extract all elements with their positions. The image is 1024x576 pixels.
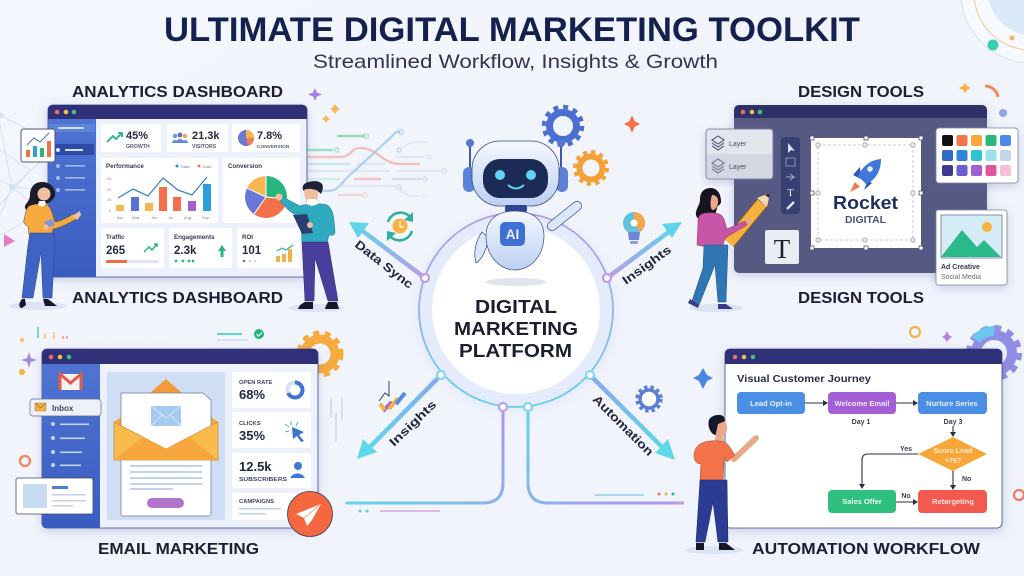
branch labels: No bbox=[901, 493, 911, 500]
platform glow bbox=[418, 214, 614, 410]
email sidebar bbox=[42, 364, 100, 528]
canvas with rocket logo: Rocket bbox=[833, 192, 898, 213]
robot neck bbox=[505, 205, 527, 212]
layer panel: Layer bbox=[729, 164, 747, 171]
figure: woman with tablet bbox=[9, 182, 81, 310]
panel: design tools bbox=[734, 105, 987, 273]
stat card: growth: GROWTH bbox=[126, 144, 150, 150]
decoration: sparkles near analytics bbox=[4, 88, 340, 247]
heading: automation workflow: AUTOMATION WORKFLOW bbox=[752, 541, 981, 558]
stat card: campaigns bbox=[232, 493, 311, 520]
canvas with rocket logo: DIGITAL bbox=[845, 215, 886, 226]
heading: email marketing: EMAIL MARKETING bbox=[98, 541, 259, 558]
flow step: welcome email: Welcome Email bbox=[835, 399, 889, 408]
line and bar chart: performance: 30 bbox=[107, 176, 112, 181]
decoration: design sparkles bbox=[624, 83, 1007, 133]
connector nodes bbox=[421, 274, 611, 411]
central platform bbox=[418, 213, 614, 410]
pie chart: conversion: Conversion bbox=[228, 163, 262, 170]
automation window frame bbox=[725, 349, 1002, 528]
line and bar chart: performance: 10 bbox=[107, 197, 112, 202]
line and bar chart: performance: Jun bbox=[151, 215, 157, 220]
branch labels: No bbox=[962, 476, 971, 483]
robot mascot bbox=[463, 107, 607, 270]
canvas with rocket logo bbox=[810, 136, 923, 250]
icon: bar chart insights bbox=[379, 381, 405, 411]
robot visor bbox=[483, 159, 548, 198]
decoration: email area sparkles bbox=[19, 327, 342, 466]
panel: email marketing bbox=[42, 349, 318, 528]
label: insights left: Insights bbox=[386, 397, 440, 449]
heading: analytics bottom: ANALYTICS DASHBOARD bbox=[72, 290, 283, 307]
stat card: engagements: 2.3k bbox=[174, 245, 197, 257]
day labels bbox=[852, 419, 962, 426]
line and bar chart: performance: Data bbox=[203, 164, 212, 169]
figure: man with tablet bbox=[276, 181, 344, 312]
decision: score lead bbox=[918, 437, 987, 471]
line and bar chart: performance: Aug bbox=[184, 215, 191, 220]
subtitle: Streamlined Workflow, Insights & Growth bbox=[313, 51, 718, 73]
stat card: open rate: 68% bbox=[239, 387, 265, 402]
heading: design top: DESIGN TOOLS bbox=[798, 84, 924, 101]
stat card: conversion bbox=[232, 124, 300, 152]
journey title: Visual Customer Journey bbox=[737, 373, 871, 385]
flow step: welcome email bbox=[828, 392, 896, 414]
stat card: ROI bbox=[237, 228, 300, 268]
label: data sync: Data Sync bbox=[352, 237, 416, 292]
stat card: clicks bbox=[232, 412, 311, 448]
line and bar chart: performance: Apr bbox=[117, 215, 124, 220]
label: insights right: Insights bbox=[620, 242, 674, 287]
icon: orange gear bbox=[575, 152, 607, 184]
title: ULTIMATE DIGITAL MARKETING TOOLKIT bbox=[164, 11, 860, 49]
email preview area bbox=[107, 372, 225, 520]
pie chart: conversion bbox=[223, 158, 300, 223]
label: automation: Automation bbox=[590, 392, 656, 459]
icon: T tool bbox=[765, 230, 799, 264]
decision: score lead: >75? bbox=[945, 456, 961, 465]
stat card: traffic: 265 bbox=[106, 245, 126, 257]
icon: gear behind automation bbox=[969, 328, 1019, 378]
flow step: nurture series bbox=[918, 392, 987, 414]
stat card: open rate: OPEN RATE bbox=[239, 380, 273, 386]
day labels: Day 1 bbox=[852, 419, 870, 426]
stat card: traffic: Traffic bbox=[106, 234, 125, 241]
icon: light bulb bbox=[623, 212, 645, 244]
stat card: subscribers: SUBSCRIBERS bbox=[239, 477, 287, 483]
stat card: clicks: CLICKS bbox=[239, 421, 261, 427]
robot right arm bbox=[552, 206, 577, 226]
tool strip bbox=[781, 137, 800, 214]
arrow: insights left bbox=[357, 375, 441, 459]
stat card: open rate bbox=[232, 372, 311, 408]
platform ring bbox=[419, 213, 613, 407]
flow step: nurture series: Nurture Series bbox=[926, 399, 978, 408]
arrow: insights right bbox=[607, 222, 682, 278]
decoration: corner rings bbox=[961, 0, 1024, 63]
day labels: Day 3 bbox=[944, 419, 962, 426]
robot ears bbox=[463, 167, 568, 192]
stat card: engagements bbox=[169, 228, 232, 268]
stat card: engagements: Engagements bbox=[174, 234, 215, 241]
icon: blue gear bbox=[544, 107, 582, 145]
inbox tab bbox=[30, 399, 101, 416]
platform label: DIGITAL bbox=[475, 297, 557, 317]
stat card: growth bbox=[101, 124, 161, 152]
heading: analytics top: ANALYTICS DASHBOARD bbox=[72, 84, 283, 101]
analytics window frame bbox=[48, 105, 307, 277]
icon: T tool: T bbox=[774, 234, 791, 264]
branch labels: Yes bbox=[900, 446, 912, 453]
flow step: retargeting: Retargeting bbox=[932, 497, 974, 506]
icon: data sync clock bbox=[387, 212, 413, 241]
panel: automation workflow bbox=[725, 349, 1002, 528]
stat card: conversion: 7.8% bbox=[257, 130, 282, 142]
platform label bbox=[454, 297, 578, 361]
line and bar chart: performance: 20 bbox=[107, 187, 112, 192]
line and bar chart: performance: Data bbox=[181, 164, 190, 169]
stat card: visitors: VISITORS bbox=[192, 144, 217, 150]
line and bar chart: performance: 0 bbox=[109, 208, 112, 213]
decision: score lead: Score Lead bbox=[934, 446, 972, 455]
decoration: data streams right of analytics bbox=[307, 130, 446, 198]
design window frame bbox=[734, 105, 987, 273]
icon: rocket bbox=[850, 159, 881, 192]
robot left arm bbox=[475, 232, 489, 263]
layer panel: Layer bbox=[729, 141, 747, 148]
ad creative card: Ad Creative bbox=[941, 264, 980, 271]
flow step: sales offer bbox=[828, 490, 896, 513]
shadow under robot bbox=[486, 278, 546, 286]
decoration: left network lines bbox=[0, 113, 48, 235]
stat card: ROI: ROI bbox=[242, 234, 253, 241]
icon: gmail bbox=[60, 374, 81, 390]
flow step: lead opt-in bbox=[737, 392, 805, 414]
stat card: ROI: 101 bbox=[242, 245, 262, 257]
platform white disc bbox=[432, 226, 600, 394]
flow step: retargeting bbox=[918, 490, 987, 513]
robot body bbox=[486, 211, 544, 270]
stat card: traffic bbox=[101, 228, 164, 268]
inbox tab: Inbox bbox=[52, 404, 74, 413]
stat card: growth: 45% bbox=[126, 130, 148, 142]
figure: man pointing bbox=[685, 415, 756, 554]
email window frame bbox=[42, 349, 318, 528]
line and bar chart: performance: Sep bbox=[202, 215, 210, 220]
design title bar bbox=[734, 105, 987, 118]
decoration: automation sparkles bbox=[673, 327, 1024, 503]
layer panel bbox=[706, 129, 773, 179]
arrow: data sync bbox=[349, 222, 425, 278]
icon: floating chart card bbox=[21, 129, 55, 162]
flow arrowheads bbox=[823, 400, 956, 505]
automation title bar bbox=[725, 349, 1002, 364]
platform label: MARKETING bbox=[454, 319, 578, 339]
flow step: sales offer: Sales Offer bbox=[842, 497, 882, 506]
stat card: subscribers bbox=[232, 453, 311, 488]
line and bar chart: performance: May bbox=[132, 215, 140, 220]
arrow: automation bbox=[590, 375, 675, 460]
stat card: campaigns: CAMPAIGNS bbox=[239, 499, 274, 505]
branch labels bbox=[900, 446, 971, 500]
line and bar chart: performance: Jul bbox=[168, 215, 173, 220]
flow arrows bbox=[805, 403, 953, 502]
line and bar chart: performance bbox=[101, 158, 218, 223]
flow step: lead opt-in: Lead Opt-in bbox=[750, 399, 792, 408]
figure: woman with pencil bbox=[688, 188, 770, 312]
icon: orange gear behind email bbox=[299, 333, 341, 375]
robot head bbox=[472, 141, 559, 206]
heading: design bottom: DESIGN TOOLS bbox=[798, 290, 924, 307]
line and bar chart: performance: Performance bbox=[106, 163, 144, 170]
stat card: conversion: CONVERSION bbox=[257, 144, 290, 150]
icon: automation gear bbox=[637, 387, 661, 411]
color palette card bbox=[936, 128, 1018, 183]
ad creative card: Social Media bbox=[941, 274, 981, 281]
floating mail preview card bbox=[16, 478, 93, 514]
stat card: subscribers: 12.5k bbox=[239, 459, 272, 474]
icon: envelope and letter bbox=[114, 379, 218, 516]
analytics sidebar bbox=[48, 118, 96, 277]
analytics title bar bbox=[48, 105, 307, 119]
decoration: connector dots and dashes bbox=[358, 492, 674, 512]
robot antennas bbox=[466, 139, 565, 170]
tool strip: T bbox=[787, 187, 794, 199]
panel: analytics dashboard bbox=[48, 105, 307, 277]
connector: left line bbox=[347, 410, 503, 503]
platform label: PLATFORM bbox=[459, 341, 572, 361]
AI badge: AI bbox=[506, 227, 519, 242]
stat card: visitors: 21.3k bbox=[192, 130, 220, 142]
email title bar bbox=[42, 349, 318, 364]
connector: right line bbox=[528, 410, 682, 503]
stat card: visitors bbox=[167, 124, 228, 152]
stat card: clicks: 35% bbox=[239, 428, 265, 443]
AI badge bbox=[500, 222, 525, 246]
ad creative card bbox=[936, 210, 1007, 285]
icon: pencil bbox=[729, 193, 770, 243]
icon: send button bbox=[288, 492, 332, 536]
